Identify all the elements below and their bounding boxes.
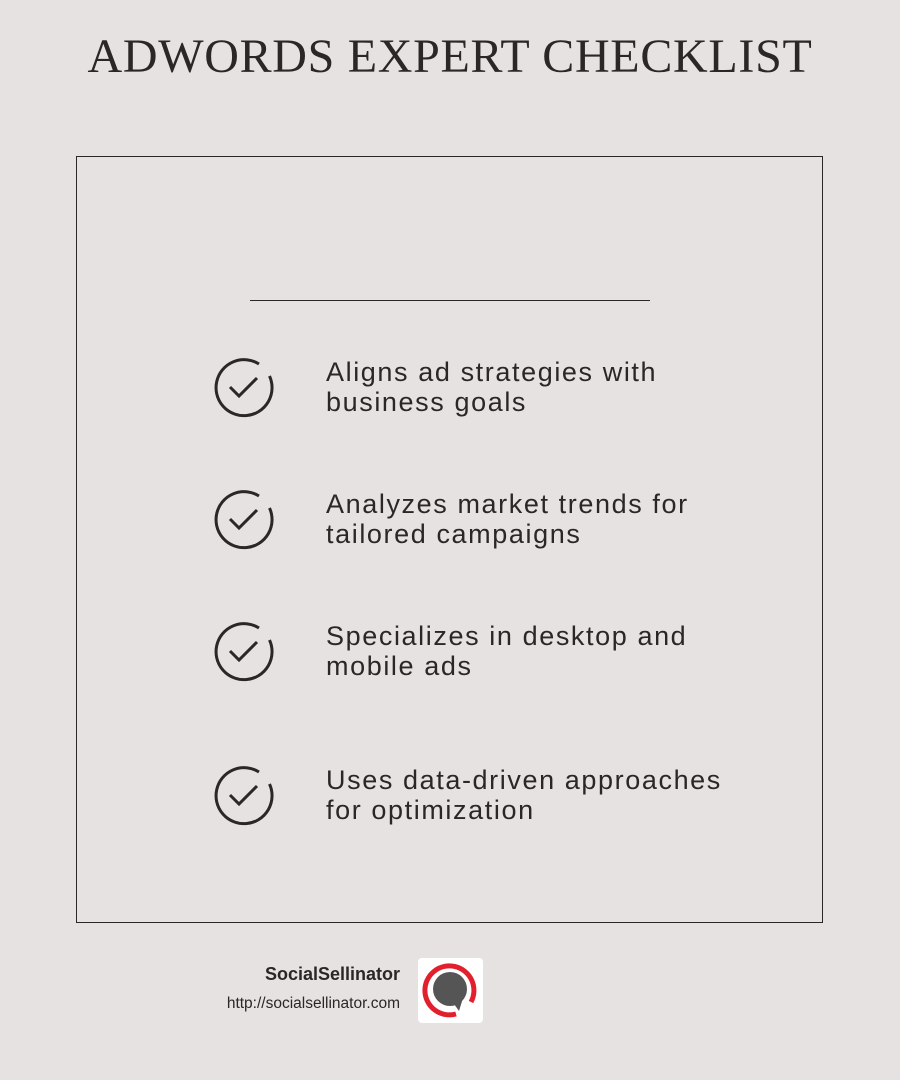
brand name: SocialSellinator (265, 964, 400, 984)
item 4 (214, 765, 722, 826)
item 2: tailored campaigns (326, 519, 581, 549)
icon: logo (418, 958, 483, 1023)
item 1: Aligns ad strategies with (326, 357, 657, 387)
item 3: mobile ads (326, 651, 473, 681)
item 2 (214, 489, 689, 550)
title: ADWORDS EXPERT CHECKLIST (87, 30, 813, 83)
item 4: for optimization (326, 795, 535, 825)
url: http://socialsellinator.com (227, 995, 400, 1012)
panel: checklist (76, 156, 823, 923)
item 2: Analyzes market trends for (326, 489, 689, 519)
divider line (250, 300, 650, 301)
item 3 (214, 621, 687, 682)
item 1: business goals (326, 387, 527, 417)
item 1 (214, 357, 657, 418)
item 3: Specializes in desktop and (326, 621, 687, 651)
item 4: Uses data-driven approaches (326, 765, 722, 795)
